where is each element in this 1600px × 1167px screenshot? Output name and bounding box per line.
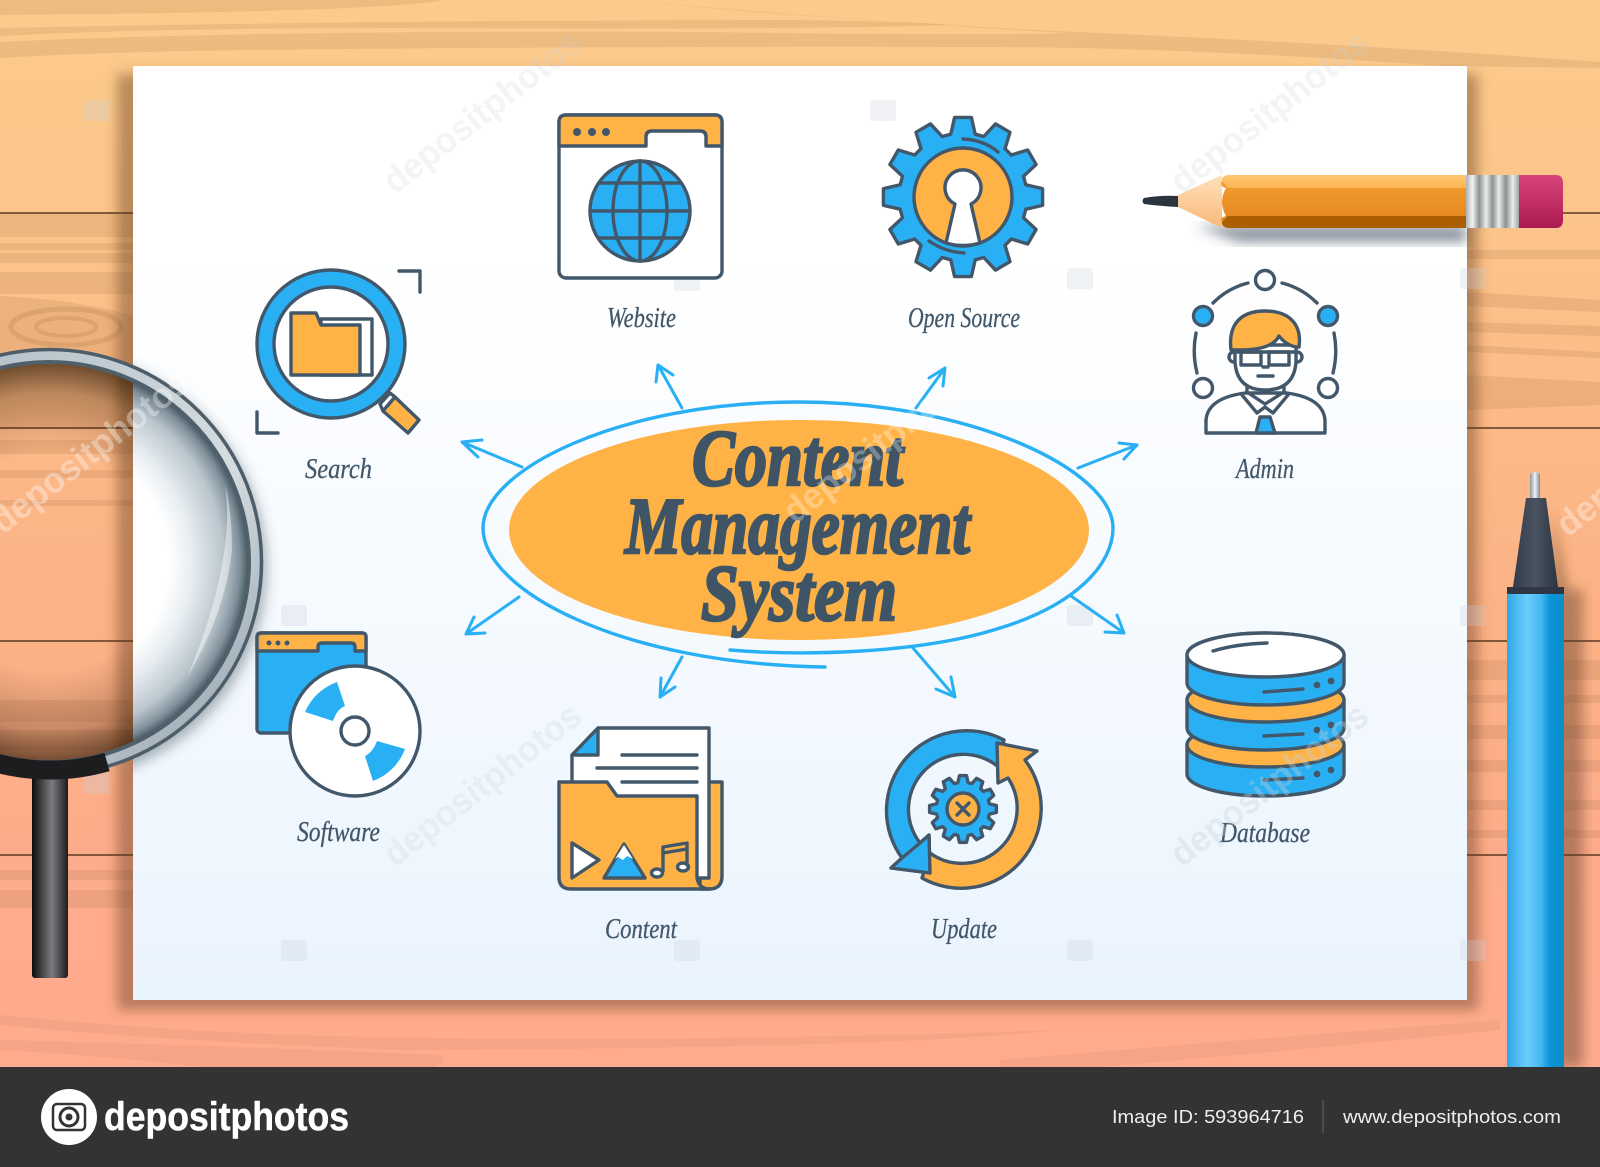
arrow: to Search bbox=[462, 440, 522, 467]
pencil body bbox=[1221, 175, 1466, 228]
title line: Management: Management bbox=[623, 483, 972, 571]
arrow: to Content bbox=[660, 657, 682, 697]
arrow: to Website bbox=[656, 365, 682, 408]
website url: www.depositphotos.com bbox=[1342, 1107, 1561, 1127]
image id: Image ID: 593964716 bbox=[1112, 1107, 1304, 1127]
label: Software: Software bbox=[297, 816, 380, 848]
label: Update: Update bbox=[931, 913, 997, 945]
pencil tip bbox=[1178, 175, 1222, 228]
icon: open source gear bbox=[883, 117, 1043, 277]
watermarks bbox=[0, 21, 1600, 874]
icon: software window with disc bbox=[257, 633, 420, 796]
logo mark bbox=[41, 1089, 97, 1145]
icon: content folder bbox=[559, 728, 722, 889]
pen cone bbox=[1513, 498, 1558, 587]
label: Open Source: Open Source bbox=[908, 302, 1020, 334]
title line: Content: Content bbox=[692, 415, 905, 503]
watermarks: depositphotos bbox=[1162, 694, 1376, 874]
label: Database: Database bbox=[1219, 817, 1310, 849]
eraser bbox=[1519, 175, 1563, 228]
paper sheet bbox=[133, 66, 1467, 1000]
icon: update arrows with gear bbox=[886, 731, 1041, 888]
magnifier shadow bbox=[133, 361, 275, 774]
black rim section bbox=[0, 754, 107, 770]
label: Content: Content bbox=[605, 913, 678, 945]
arrow: to Open Source bbox=[916, 368, 945, 408]
orange ellipse bbox=[509, 420, 1089, 640]
pencil bbox=[1142, 175, 1563, 242]
title line: System: System bbox=[701, 550, 897, 638]
lens over wood bbox=[0, 360, 263, 770]
arrow: to Software bbox=[466, 597, 519, 634]
pencil shadow bbox=[1195, 226, 1466, 242]
watermarks: depositphotos bbox=[375, 694, 589, 874]
icon: website window with globe bbox=[559, 115, 722, 278]
faint camera watermarks bbox=[84, 100, 1486, 961]
arrows radiating from ellipse bbox=[462, 365, 1137, 697]
pen barrel bbox=[1507, 594, 1564, 1067]
icon: search magnifier with folder bbox=[257, 270, 420, 433]
watermarks: depositphotos bbox=[775, 351, 989, 531]
label: Website: Website bbox=[607, 302, 676, 334]
arrow: to Admin bbox=[1078, 443, 1137, 468]
pen shadow bbox=[1552, 510, 1583, 1067]
pen tip bbox=[1530, 472, 1540, 498]
footer bar bbox=[0, 1067, 1600, 1167]
ferrule bbox=[1466, 175, 1519, 228]
watermarks: depositphotos bbox=[1162, 21, 1376, 201]
icon: admin person bbox=[1194, 270, 1338, 433]
lens highlight bbox=[187, 485, 232, 678]
handle bbox=[32, 770, 68, 978]
label: Search: Search bbox=[305, 453, 372, 485]
icon: database stack bbox=[1187, 633, 1344, 796]
central ellipse: Content Management System bbox=[483, 402, 1113, 667]
logo wordmark: depositphotos bbox=[104, 1095, 349, 1139]
arrow: to Update bbox=[913, 648, 955, 697]
watermarks: depositphotos bbox=[375, 21, 589, 201]
sketched blue ring bbox=[483, 402, 1113, 667]
label: Admin: Admin bbox=[1234, 453, 1294, 485]
magnifying glass bbox=[0, 350, 267, 978]
paper shadow bbox=[117, 74, 1478, 1010]
arrow: to Database bbox=[1071, 596, 1124, 633]
pen bbox=[1507, 472, 1583, 1067]
metal rim bbox=[0, 356, 256, 768]
